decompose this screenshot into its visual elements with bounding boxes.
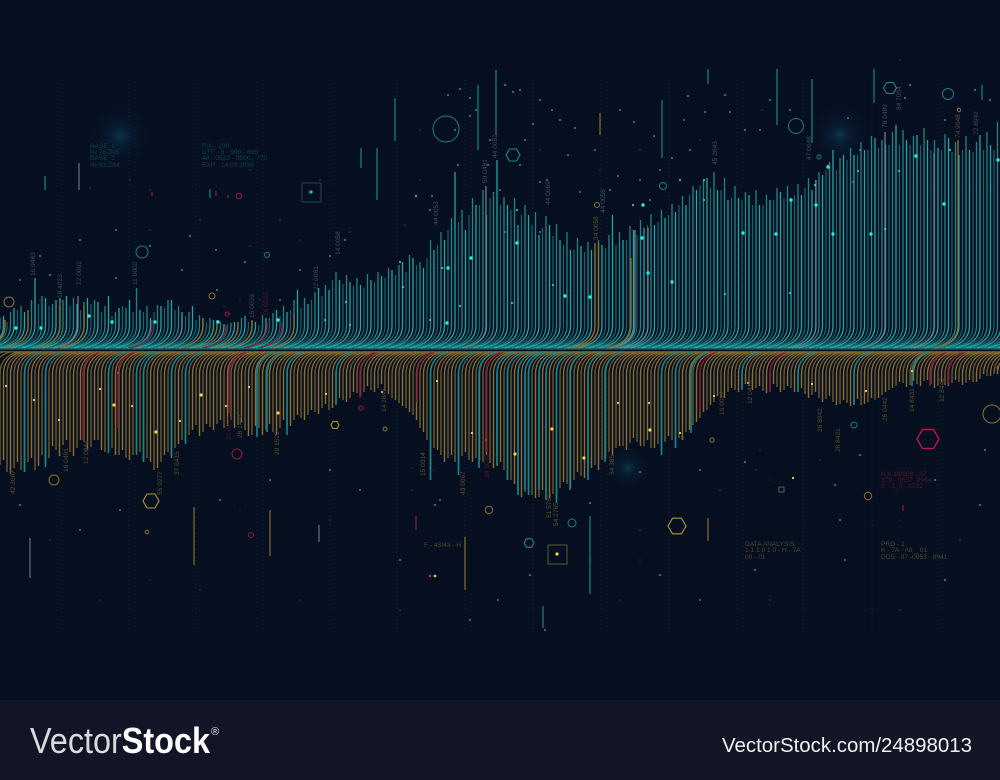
rotated value labels upper: 18 4023 xyxy=(57,274,64,298)
rotated value labels orange: 14 8431 xyxy=(909,388,916,412)
rotated value labels red: 20 0232 xyxy=(226,416,233,440)
lower bars orange mid xyxy=(4,352,1000,500)
rotated value labels orange: 14 2845 xyxy=(381,388,388,412)
upper bars grey accents xyxy=(54,132,934,348)
upper bars dim xyxy=(0,145,1000,348)
glow spots xyxy=(90,105,870,490)
rotated value labels upper: 45 2843 xyxy=(712,141,719,165)
text block: red codes: 879 - 0657 -9964 xyxy=(881,477,932,484)
chart: lower orange bars xyxy=(0,352,1000,503)
text block: data analysis: 00 - 01 xyxy=(745,554,766,561)
footer id text: VectorStock.com/24898013 xyxy=(722,735,972,757)
rotated value labels orange: 26 8942 xyxy=(817,408,824,432)
rotated value labels orange: 34 385 xyxy=(609,454,616,475)
lower bars orange dim xyxy=(0,352,1000,497)
text block: pro xyxy=(881,541,948,561)
ring markers xyxy=(4,88,1000,538)
upper bars mid xyxy=(0,122,1000,348)
text block: fix codes xyxy=(202,143,268,169)
lower bars teal accents xyxy=(24,352,929,503)
rotated value labels upper: 59 0451 xyxy=(482,159,489,183)
hexagon markers xyxy=(143,82,939,547)
rotated value labels orange: 12 8442 xyxy=(939,378,946,402)
rotated value labels orange: 43 0067 xyxy=(460,471,467,495)
rotated value labels red: 16 0022 xyxy=(263,292,270,316)
text block: fix codes: FIX - 290 xyxy=(202,143,229,150)
floating vertical ticks xyxy=(30,69,982,628)
text block: pro: PRO - 1 xyxy=(881,541,905,548)
rotated value labels upper: 72 8942 xyxy=(973,111,980,135)
rotated value labels upper: 44 0052 xyxy=(492,134,499,158)
center axis band xyxy=(0,348,1000,353)
rotated value labels upper: 78 0489 xyxy=(882,104,889,128)
text block: data analysis: DATA ANALYSIS xyxy=(745,541,795,548)
rotated value labels upper: 44 0058 xyxy=(600,189,607,213)
rotated value labels orange: 26 0442 xyxy=(882,397,889,421)
rotated value labels upper: 22 0061 xyxy=(76,261,83,285)
rotated value labels orange: 74 9948 xyxy=(955,114,962,138)
orange point xyxy=(434,575,436,577)
chart: upper teal bars xyxy=(0,122,1000,348)
upper bars red accents xyxy=(128,320,282,348)
footer logo: VectorStock xyxy=(30,720,211,761)
text block: fix codes: 48 - 0523 - 9500 - 770 xyxy=(202,155,268,162)
rotated value labels orange: 29 1529 xyxy=(274,431,281,455)
scattered faint particles xyxy=(20,60,990,630)
text block: red codes: N A 10/908 - 87 xyxy=(881,471,927,478)
rotated value labels upper: 47 0048 xyxy=(806,136,813,160)
rotated value labels orange: 42 3007 xyxy=(10,470,17,494)
rotated value labels orange: 16 0012 xyxy=(719,391,726,415)
rotated value labels orange: 12 0415 xyxy=(747,380,754,404)
footer band xyxy=(0,700,1000,780)
rotated value labels upper: 22 0061 xyxy=(313,266,320,290)
rotated value labels red: 34 1076 xyxy=(484,454,491,478)
text block: base codes: BASE_1 xyxy=(90,143,115,150)
rotated value labels orange: 15 0314 xyxy=(420,452,427,476)
rotated value labels upper: 15 0026 xyxy=(249,294,256,318)
rotated value labels orange: 51 5781 xyxy=(546,494,553,518)
text block: fix codes: EXP - 14 03 2036 xyxy=(202,162,254,169)
footer logo: ® xyxy=(211,726,219,738)
lower bars red accents xyxy=(83,352,965,452)
text block: base codes: BASE_2 xyxy=(90,155,115,162)
bright teal data points xyxy=(16,150,998,328)
red data points xyxy=(118,373,486,576)
rotated value labels red xyxy=(226,292,491,478)
text block: data analysis: 1 1 1 0 1 0 - H - 7A xyxy=(745,547,801,554)
text block: data analysis xyxy=(745,541,801,561)
rotated value labels upper: 84 7004 xyxy=(896,86,903,110)
yellow data points xyxy=(6,371,912,554)
text block: pro: DDS - 87 -0953 - 8941 xyxy=(881,554,948,561)
rotated value labels orange: 28 8421 xyxy=(835,428,842,452)
text block: F code: F - 43/43 - H xyxy=(424,542,461,549)
text block: red codes xyxy=(881,471,932,490)
text block: base codes xyxy=(90,143,120,169)
rotated value labels upper: 44 0069 xyxy=(545,181,552,205)
square target markers xyxy=(302,183,784,564)
text block: red codes: S - 1_5 - 8732 xyxy=(881,483,923,490)
text block: base codes: № 93-284 xyxy=(90,162,120,169)
upper bars bright xyxy=(0,125,1000,348)
text block: base codes: № 78-905 xyxy=(90,149,120,156)
rotated value labels upper: 16 9483 xyxy=(30,252,37,276)
rotated value labels upper: 44 0053 xyxy=(433,201,440,225)
text block: fix codes: UTF - 8 - 990 - 665 xyxy=(202,149,258,156)
rotated value labels orange: 54 2765 xyxy=(553,502,560,526)
rotated value labels upper: 14 0058 xyxy=(335,231,342,255)
rotated value labels orange: 28 1443 xyxy=(237,414,244,438)
upper bars orange accents xyxy=(0,140,958,348)
rotated value labels orange: 16 0491 xyxy=(63,448,70,472)
rotated value labels upper: 11 0002 xyxy=(132,261,139,285)
rotated value labels orange: 12 0841 xyxy=(83,440,90,464)
rotated value labels orange: 34 0058 xyxy=(593,216,600,240)
rotated value labels orange: 55 9277 xyxy=(157,471,164,495)
rotated value labels upper xyxy=(30,86,980,318)
rotated value labels orange: 37 6415 xyxy=(174,451,181,475)
text block: pro: K - 7A - A8 _ 01 xyxy=(881,547,928,554)
rotated value labels orange xyxy=(10,114,962,526)
